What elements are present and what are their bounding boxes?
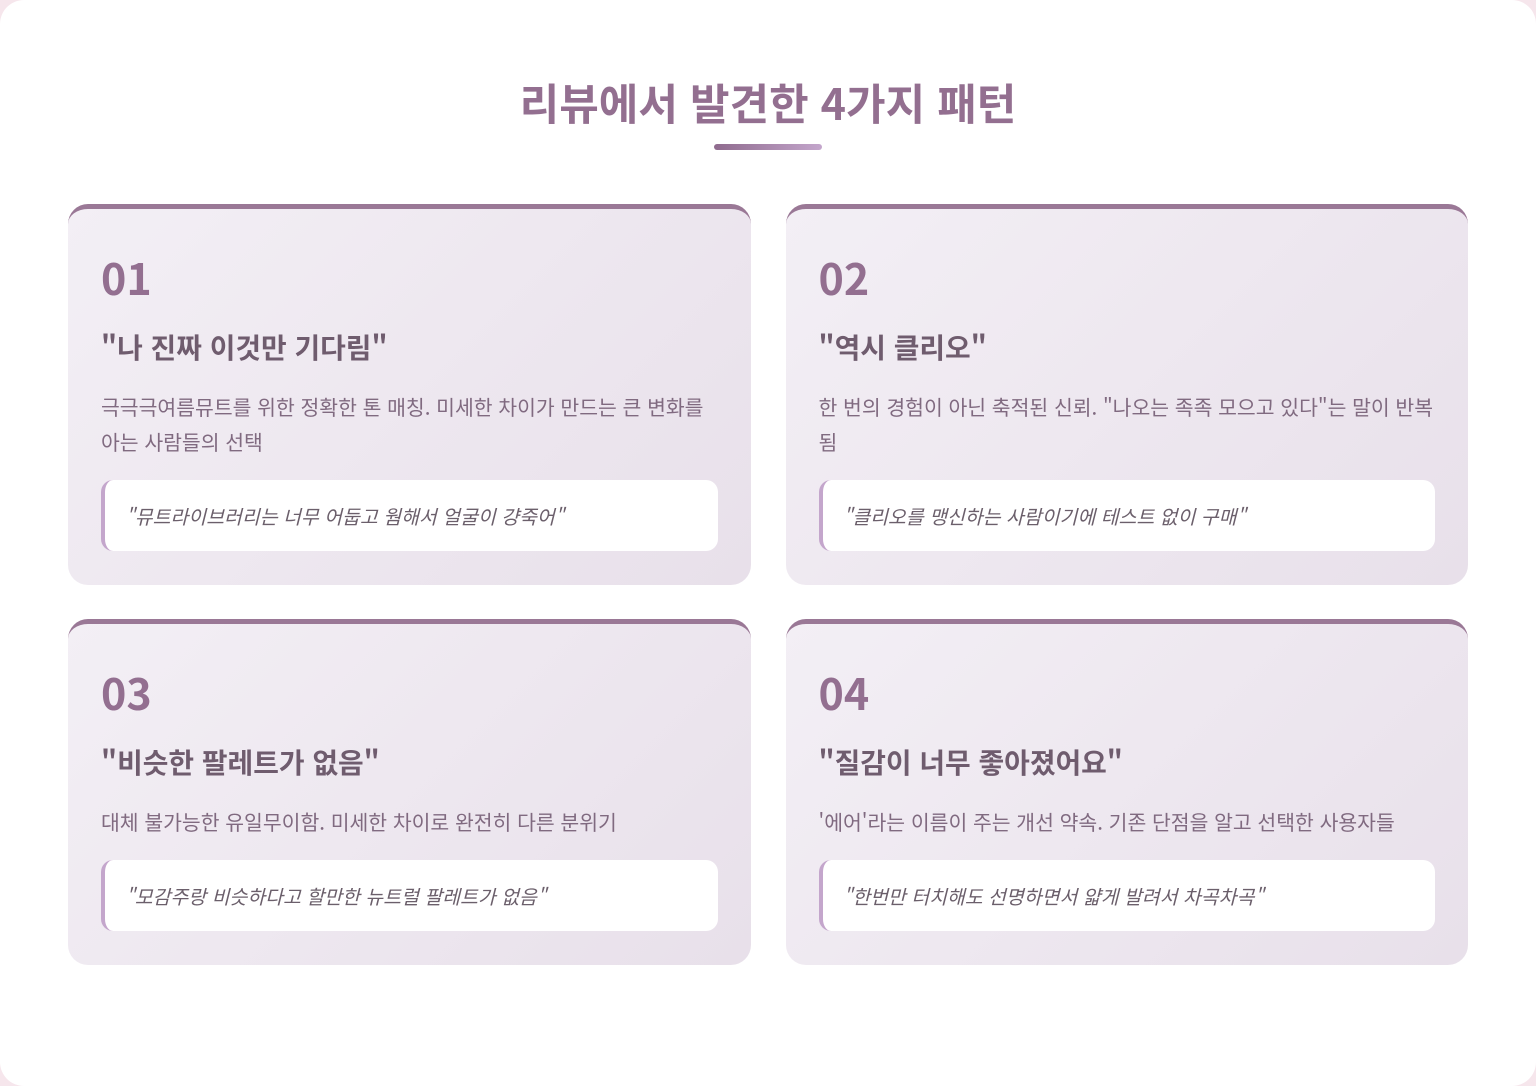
quote 03: "모감주랑 비슷하다고 할만한 뉴트럴 팔레트가 없음" [126,880,546,910]
title underline [714,144,822,150]
quote 02: "클리오를 맹신하는 사람이기에 테스트 없이 구매" [843,500,1246,530]
number 04: 04 [818,660,869,722]
quote 04 [818,860,1435,931]
quote 01 [101,480,718,551]
number 02: 02 [818,246,869,308]
heading 02: "역시 클리오" [818,326,987,366]
panel: pattern 02 [786,204,1468,585]
description 02: 한 번의 경험이 아닌 축적된 신뢰. "나오는 족족 모으고 있다"는 말이 반복됨 [818,391,1433,456]
heading 04: "질감이 너무 좋아졌어요" [818,742,1123,782]
quote 04: "한번만 터치해도 선명하면서 얇게 발려서 차곡차곡" [843,880,1264,910]
panel: pattern 01 [68,204,751,585]
description 01: 극극극여름뮤트를 위한 정확한 톤 매칭. 미세한 차이가 만드는 큰 변화를 아는 사람들의 선택 [101,391,703,456]
description 03: 대체 불가능한 유일무이함. 미세한 차이로 완전히 다른 분위기 [101,806,617,836]
description 04: '에어'라는 이름이 주는 개선 약속. 기존 단점을 알고 선택한 사용자들 [818,806,1395,836]
number 03: 03 [101,660,152,722]
panel: pattern 03 [68,618,751,965]
quote 01: "뮤트라이브러리는 너무 어둡고 웜해서 얼굴이 걍죽어" [126,500,564,530]
number 01: 01 [101,246,152,308]
quote 02 [818,480,1435,551]
heading 03: "비슷한 팔레트가 없음" [101,742,380,782]
panel: pattern 04 [786,618,1468,965]
title: 리뷰에서 발견한 4가지 패턴 [520,71,1016,133]
quote 03 [101,860,718,931]
heading 01: "나 진짜 이것만 기다림" [101,326,388,366]
